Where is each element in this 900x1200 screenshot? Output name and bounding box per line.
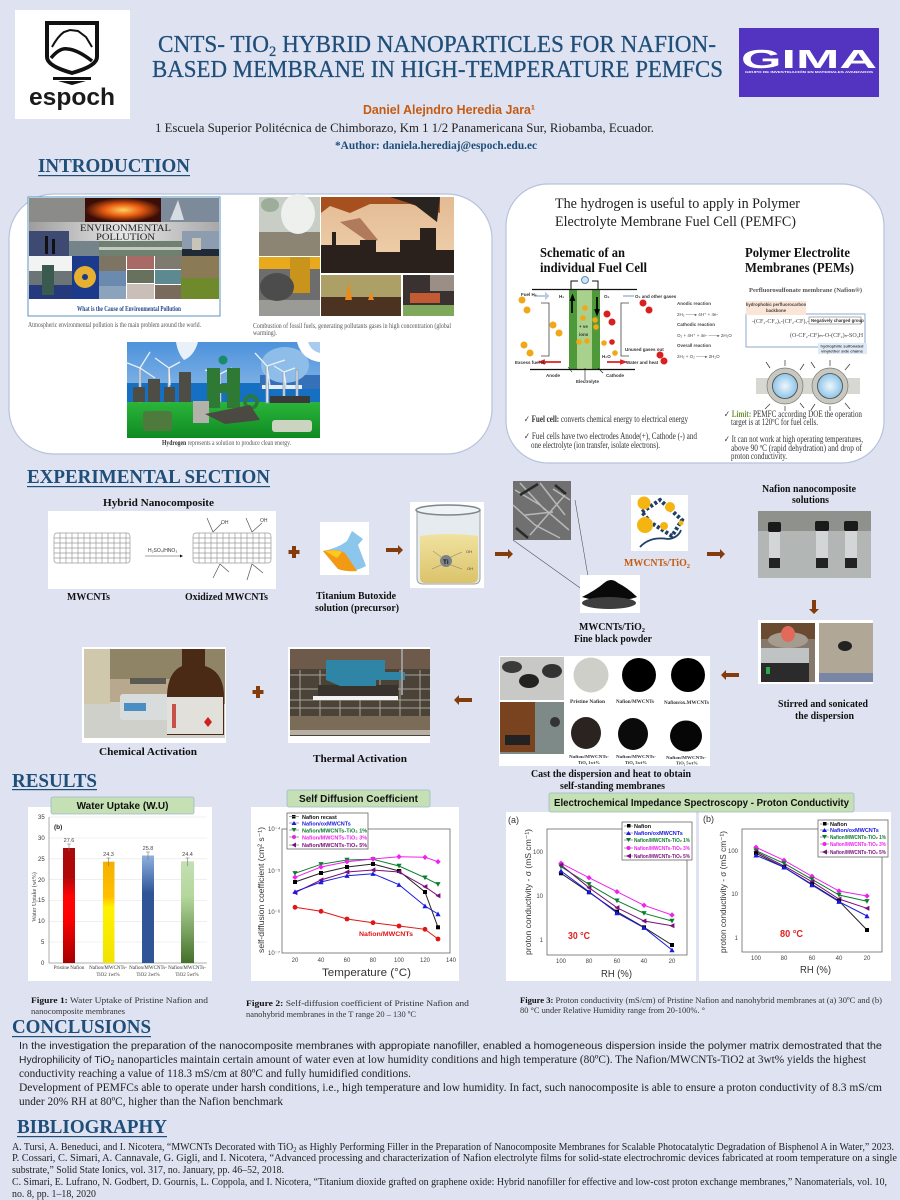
label: fine black powder: 2	[642, 627, 645, 634]
chart: self diffusion coefficient	[251, 807, 459, 981]
image: cast membranes: Nafion/MWCNTs-	[569, 754, 610, 759]
image: environmental pollution collage	[28, 197, 220, 316]
legend: Nafion/MWCNTs-TiO₂ 3%	[830, 842, 886, 848]
image: fossil fuel combustion collage	[259, 194, 454, 316]
diagram: Nafion chemical structure: backbone	[766, 308, 787, 313]
heading: polymer membranes	[745, 246, 854, 276]
image: cast membranes: TiO₂ 3wt%	[625, 760, 647, 765]
chart: water uptake bar chart: 5	[41, 940, 45, 946]
step: hybrid nanocomposite: OH	[260, 518, 268, 524]
image: flask with precursor	[320, 522, 369, 575]
arrow: to casting	[721, 670, 739, 680]
label: titanium butoxide: solution (precursor)	[315, 603, 399, 614]
icon: plus	[288, 546, 300, 558]
label: stirred and sonicated: the dispersion	[795, 711, 854, 722]
chart: proton conductivity at 80 C: 100	[751, 956, 762, 962]
caption: fossil fuels: warming).	[253, 329, 277, 337]
chart: proton conductivity at 80 C: 60	[809, 956, 816, 962]
image: cast membranes: Nafion/MWCNTs-	[616, 754, 657, 759]
image: MWCNTs/TiO2 nanostructure	[631, 495, 688, 551]
chart: proton conductivity at 30 C: (a)	[508, 815, 519, 825]
label: fine black powder: MWCNTs/TiO	[579, 622, 642, 633]
diagram: fuel cell schematic: Excess fuel H₂	[515, 360, 546, 365]
arrow: to SEM	[495, 549, 513, 559]
chart: water uptake bar chart: 15	[38, 898, 45, 904]
image: cast membranes: Nafion/MWCNTs-	[666, 755, 707, 760]
image: cast membranes	[499, 656, 710, 766]
title: HYBRID NANOPARTICLES FOR NAFION-	[276, 32, 716, 58]
diagram: Nafion chemical structure: Negatively charged group	[811, 318, 864, 323]
label: chemical activation: Chemical Activation	[99, 747, 197, 758]
logo: espoch	[15, 10, 130, 119]
diagram: fuel cell schematic: Anode	[546, 373, 560, 378]
bar: Pristine Nafion	[63, 838, 75, 963]
chart: water uptake bar chart: TiO2 3wt%	[136, 973, 160, 978]
heading: polymer membranes: Membranes (PEMs)	[745, 261, 854, 276]
label: perfluorosulfonate membrane: Perfluorosulfonate membrane (Nafion®)	[749, 287, 862, 294]
text: conclusions: In the investigation the preparation of the nanocomposite membranes with appropiate nanofiller, enabled a homogeneous dispersion inside the polymer matrix demostrated that the	[19, 1040, 882, 1052]
legend: Nafion/MWCNTs-TiO₂ 5%	[634, 854, 690, 860]
chart: water uptake bar chart: TiO2 5wt%	[175, 973, 199, 978]
bar: Pristine Nafion: 27.6	[64, 838, 74, 844]
heading: bibliography: BIBLIOGRAPHY	[17, 1116, 168, 1138]
chart: water uptake bar chart: 0	[41, 961, 45, 967]
diagram: oxidized nanotube	[193, 518, 271, 580]
text: hydrogen statement: The hydrogen is useful to apply in Polymer	[555, 196, 800, 212]
chart: water uptake bar chart: 20	[38, 878, 45, 884]
diagram: reaction equations: O₂ + 4H⁺ + 4e- ——▸ 2H₂O	[677, 333, 732, 338]
label: titanium butoxide: Titanium Butoxide	[316, 591, 397, 602]
chart: proton conductivity at 30 C: 80	[586, 959, 593, 965]
legend	[622, 822, 692, 860]
legend: Nafion/MWCNTs-TiO₂ 1%	[830, 835, 886, 841]
chart: self diffusion coefficient: 120	[420, 958, 431, 964]
text: conclusions: conductivity reaching a value of 118.3 mS/cm at 80ºC and fully humidified conditions.	[19, 1068, 411, 1080]
label: EIS proton conductivity: Electrochemical Impedance Spectroscopy - Proton Conductivity	[554, 798, 849, 809]
diagram: fuel cell schematic: + ve	[579, 324, 588, 329]
image: environmental pollution collage: POLLUTION	[96, 232, 156, 242]
diagram: fuel cell schematic: ions	[579, 332, 589, 337]
image: environmental pollution collage: What is the Cause of Environmental Pollution	[77, 304, 182, 313]
bar: 3 wt%: 25.8	[143, 846, 153, 852]
text: membrane limits bullets: ✓ It can not work at high operating temperatures,	[724, 434, 863, 444]
diagram: fuel cell schematic: Unused gases out	[625, 347, 664, 352]
image: cast membranes: Pristine Nafion	[570, 700, 605, 705]
heading: schematic	[540, 246, 647, 276]
text: hydrogen statement: Electrolyte Membrane Fuel Cell (PEMFC)	[555, 214, 796, 230]
chart: proton conductivity at 30 C: RH (%)	[601, 969, 632, 980]
diagram: Nafion chemical structure	[746, 301, 867, 354]
image: beaker with titanium: OH	[467, 566, 473, 571]
label: water uptake	[51, 797, 194, 814]
chart: self diffusion coefficient: 10⁻⁴	[268, 826, 281, 833]
label: self diffusion coefficient	[287, 790, 430, 807]
legend: Nafion/oxMWCNTs	[830, 828, 879, 834]
text: bibliography: no. 8, pp. 1–18, 2020	[12, 1189, 96, 1200]
author name: Daniel Alejndro Heredia Jara¹	[363, 103, 535, 117]
image: cast membranes: Nafion/ox.MWCNTs	[664, 701, 709, 706]
heading: polymer membranes: Polymer Electrolite	[745, 246, 850, 261]
image: cast membranes: TiO₂ 1wt%	[578, 760, 600, 765]
chart: proton conductivity at 80 C: 80 °C	[780, 929, 803, 940]
diagram: Nafion chemical structure: hydrophobic perfluorocarbon	[746, 302, 807, 307]
label: oxidized MWCNTs: Oxidized MWCNTs	[185, 592, 268, 603]
label: Nafion nanocomposite solutions	[762, 484, 857, 506]
text: membrane limits bullets: above 90 ºC (rapid dehydration) and drop of	[731, 443, 862, 453]
bar: 1 wt%	[103, 852, 114, 963]
chart: self diffusion coefficient: Nafion/MWCNTs	[359, 931, 413, 938]
diagram: fuel cell schematic: O₂	[604, 294, 610, 299]
text: conclusions: nanoparticles maintain certain amount of water even at low humidity conditions and high temperature (80ºC). The Nafion/MWCNTs-TiO2 at 3wt% yields the highest	[114, 1054, 867, 1066]
label: self diffusion coefficient: Self Diffusion Coefficient	[299, 794, 419, 805]
diagram: Nafion chemical structure: (O-CF₂-CF)ₘ-O-(CF₂)ₙ-SO₃H	[790, 332, 864, 339]
caption: figure 3: Figure 3: Proton conductivity (mS/cm) of Pristine Nafion and nanohybrid membranes at (a) 30ºC and (b)	[520, 995, 882, 1005]
chart: self diffusion coefficient: 60	[344, 958, 351, 964]
label: cast the dispersion: self-standing membranes	[560, 781, 665, 792]
text: bibliography: substrate,” Solid State Ionics, vol. 317, no. January, pp. 46–52, 2018.	[12, 1165, 284, 1176]
label: MWCNTs/TiO2: MWCNTs/TiO	[624, 558, 687, 569]
chart: proton conductivity at 80 C: 40	[836, 956, 843, 962]
chart: proton conductivity at 80 C: (b)	[703, 814, 714, 824]
icon: plus	[252, 686, 264, 698]
text: conclusions: 2	[111, 1060, 115, 1067]
arrow: to solutions	[707, 549, 725, 559]
chart: self diffusion coefficient: 80	[370, 958, 377, 964]
image: cast membranes: TiO₂ 5wt%	[676, 760, 698, 766]
arrow: acid oxidation: H₂SO₄/HNO₃	[148, 548, 177, 554]
caption: figure 1: Figure 1: Water Uptake of Pristine Nafion and	[31, 995, 209, 1005]
text: membrane limits bullets: proton conductivity.	[731, 451, 787, 461]
caption: figure 1	[31, 995, 209, 1016]
caption: figure 1: nanocomposite membranes	[31, 1006, 125, 1016]
chart: proton conductivity at 30 C: 60	[614, 959, 621, 965]
step: hybrid nanocomposite	[48, 498, 276, 589]
chart: proton conductivity at 30 C: 40	[641, 959, 648, 965]
chart: water uptake bar chart: Nafion/MWCNTs-	[168, 966, 206, 971]
chart: water uptake bar chart: 10	[38, 919, 45, 925]
heading: conclusions: CONCLUSIONS	[12, 1016, 151, 1038]
chart: proton conductivity at 80 C: RH (%)	[800, 965, 831, 976]
chart: self diffusion coefficient: 10⁻⁷	[268, 950, 280, 957]
panel: environmental pollution and hydrogen	[9, 194, 492, 454]
bar: 5 wt%	[181, 852, 194, 963]
diagram: fuel cell schematic	[515, 276, 677, 384]
arrow: to thermal activation	[454, 695, 472, 705]
chart: proton conductivity at 30 C: 100	[533, 850, 544, 856]
legend	[287, 813, 368, 849]
author email: *Author: daniela.herediaj@espoch.edu.ec	[335, 140, 537, 152]
diagram: reaction equations: Overall reaction	[677, 343, 711, 348]
text: fuel cell bullets: one electrolyte (ion transfer, isolate electrons).	[531, 440, 660, 450]
chart: water uptake bar chart: Water Uptake (wt%)	[31, 872, 38, 922]
logo: GIMA	[739, 28, 879, 97]
image: beaker with titanium: Ti	[443, 559, 449, 566]
heading: experimental section: EXPERIMENTAL SECTION	[27, 466, 271, 488]
diagram: fuel cell schematic: H₂O	[602, 354, 611, 359]
chart: water uptake bar chart: 35	[38, 815, 45, 821]
bar: 1 wt%: 24.3	[103, 852, 114, 858]
diagram: fuel cell schematic: H₂	[559, 294, 564, 299]
step: hybrid nanocomposite: Hybrid Nanocomposite	[103, 498, 215, 509]
logo: GIMA: GRUPO DE INVESTIGACIÓN EN MATERIALES AVANZADOS	[745, 69, 873, 74]
label: Nafion nanocomposite solutions: Nafion nanocomposite	[762, 484, 857, 495]
logo: GIMA: GIMA	[741, 44, 877, 74]
diagram: reaction equations: Anodic reaction	[677, 301, 711, 306]
caption: fossil fuels	[253, 322, 451, 337]
label: water uptake: Water Uptake (W.U)	[77, 801, 168, 812]
caption: figure 2	[246, 998, 470, 1019]
text: bibliography: A. Tursi, A. Beneduci, and I. Nicotera, “MWCNTs Decorated with TiO	[12, 1142, 311, 1153]
caption: figure 3: 80 °C under Relative Humidity range from 20-100%. °	[520, 1005, 705, 1015]
caption: figure 2: Figure 2: Self-diffusion coefficient of Pristine Nafion and	[246, 998, 470, 1008]
title: BASED MEMBRANE IN HIGH-TEMPERATURE PEMFCS	[152, 57, 723, 83]
legend: Nafion/MWCNTs-TiO₂ 5%	[302, 843, 367, 849]
bar: 5 wt%: 24.4	[182, 852, 193, 858]
legend: Nafion	[634, 824, 652, 830]
diagram: reaction equations: Cathodic reaction	[677, 322, 715, 327]
diagram: fuel cell schematic: Fuel H₂	[521, 292, 537, 297]
chart: proton conductivity at 30 C: 10	[536, 894, 544, 900]
text: conclusions: Development of PEMFCs able to operate under harsh conditions, i.e., high temperature and low humidity. In fact, such nanocomposite is able to ensure a proton conductivity of 8.3 mS/cm	[19, 1082, 882, 1094]
chart: self diffusion coefficient: 140	[446, 958, 457, 964]
chart: self diffusion coefficient: Temperature (°C)	[322, 967, 411, 979]
chart: self diffusion coefficient: self-diffusion coefficient (cm² s⁻¹)	[256, 827, 266, 953]
caption: pollution: Atmospheric environmental pollution is the main problem around the world.	[28, 321, 201, 329]
chart: water uptake bar chart: 30	[38, 836, 45, 842]
text: bibliography: 2	[293, 1146, 297, 1154]
heading: results: RESULTS	[12, 770, 97, 792]
heading: schematic: individual Fuel Cell	[540, 261, 647, 276]
chart: self diffusion coefficient: 40	[318, 958, 325, 964]
text: fuel cell bullets: ✓ Fuel cells have two electrodes Anode(+), Cathode (-) and	[524, 431, 697, 441]
diagram: fuel cell schematic: Electrolyte	[576, 379, 600, 384]
chart: proton conductivity at 30 C: 100	[556, 959, 567, 965]
label: stirred and sonicated: Stirred and sonicated	[778, 699, 868, 710]
label: Nafion nanocomposite solutions: solutions	[792, 495, 829, 506]
legend	[818, 820, 888, 857]
affiliation: 1 Escuela Superior Politécnica de Chimborazo, Km 1 1/2 Panamericana Sur, Riobamba, Ecuador.	[155, 121, 654, 135]
legend: Nafion/MWCNTs-TiO₂ 1%	[634, 838, 690, 844]
label: cast the dispersion	[531, 769, 691, 792]
chart: proton conductivity at 80 C: 20	[864, 956, 871, 962]
title	[152, 32, 723, 83]
chart: self diffusion coefficient: 10⁻⁵	[268, 868, 281, 875]
chart: proton conductivity at 80 C: 80	[781, 956, 788, 962]
diagram: pristine nanotube	[54, 533, 130, 563]
text: fuel cell bullets	[524, 414, 697, 450]
text: bibliography	[12, 1142, 897, 1200]
image: black powder with zoom lines	[513, 500, 640, 613]
legend: Nafion/MWCNTs-TiO₂ 1%	[302, 828, 367, 834]
text: fuel cell bullets: ✓ Fuel cell: converts chemical energy to electrical energy	[524, 414, 688, 424]
chart: proton conductivity at 80 C: 100	[728, 849, 739, 855]
chart: proton conductivity at 80 C	[699, 812, 891, 981]
label: stirred and sonicated	[778, 699, 868, 722]
legend: Nafion/oxMWCNTs	[634, 831, 683, 837]
chart: water uptake bar chart: TiO2 1wt%	[96, 973, 120, 978]
chart: proton conductivity at 30 C: 30 °C	[568, 931, 590, 942]
chart: self diffusion coefficient: 100	[394, 958, 405, 964]
bar: 3 wt%	[142, 846, 154, 963]
diagram: Nafion chemical structure: -(CF₂-CF₂)ₓ-(CF₂-CF)ᵧ-	[752, 318, 809, 325]
label: fine black powder	[574, 622, 653, 645]
text: bibliography: P. Cossari, C. Simari, A. Cannavale, G. Gigli, and I. Nicotera, “Advanced processing and characterization of Nafion electrolyte films for solid-state electrochromic devices fabricated at room temperature on a single	[12, 1153, 897, 1164]
chart: proton conductivity at 30 C: 1	[540, 938, 544, 944]
image: SEM micrograph	[513, 481, 571, 540]
image: beaker with titanium	[410, 502, 484, 588]
text: membrane limits bullets: ✓ Limit: PEMFC according DOE the operation	[724, 409, 862, 419]
arrow: acid oxidation	[145, 548, 183, 558]
image: cast membranes: Nafion/MWCNTs	[616, 700, 654, 705]
label: MWCNTs: MWCNTs	[67, 592, 110, 603]
chart: proton conductivity at 80 C: proton conductivity - σ (mS cm⁻¹)	[718, 831, 728, 953]
legend: Nafion/oxMWCNTs	[302, 822, 351, 828]
image: beaker with titanium: OH	[466, 549, 472, 554]
heading: introduction: INTRODUCTION	[38, 155, 191, 177]
diagram: Nafion chemical structure: hydrophilic sulfonated	[821, 344, 864, 348]
legend: Nafion/MWCNTs-TiO₂ 3%	[634, 846, 690, 852]
diagram: fuel cell schematic: Cathode	[606, 373, 624, 378]
image: environmental pollution collage: ENVIRONMENTAL	[80, 223, 171, 233]
caption: hydrogen: Hydrogen represents a solution to produce clean energy.	[162, 439, 291, 447]
image: solution vials	[758, 511, 871, 578]
arrow: down to stirring	[809, 600, 819, 614]
chart: proton conductivity at 30 C: 20	[669, 959, 676, 965]
image: stirring and sonication	[758, 620, 873, 684]
diagram: reaction equations	[677, 301, 732, 359]
chart: proton conductivity at 30 C: proton conductivity - σ (mS cm⁻¹)	[523, 829, 533, 955]
text: conclusions: under 20% RH at 80ºC, higher than the Nafion benchmark	[19, 1096, 283, 1108]
diagram: fuel cell schematic: Water and heat	[626, 360, 659, 365]
caption: figure 2: nanohybrid membranes in the T range 20 – 130 ºC	[246, 1009, 416, 1019]
label: MWCNTs/TiO2: 2	[687, 563, 690, 570]
title: 2	[269, 44, 276, 60]
text: hydrogen statement	[555, 196, 800, 230]
text: membrane limits bullets: target is at 120ºC for fuel cells.	[731, 417, 818, 427]
title: CNTS- TIO	[158, 32, 273, 58]
label: cast the dispersion: Cast the dispersion and heat to obtain	[531, 769, 691, 780]
chart: water uptake bar chart: Nafion/MWCNTs-	[129, 966, 167, 971]
heading: schematic: Schematic of an	[540, 246, 625, 261]
label: EIS proton conductivity	[549, 793, 854, 812]
chart: proton conductivity at 30 C	[506, 812, 696, 981]
diagram: reaction equations: 2H₂ + O₂ ——▸ 2H₂O	[677, 354, 720, 359]
diagram: Nafion ion clusters	[756, 360, 860, 411]
legend: Nafion	[830, 822, 848, 828]
legend: Nafion/MWCNTs-TiO₂ 3%	[302, 836, 367, 842]
caption: figure 3	[520, 995, 882, 1015]
diagram: fuel cell schematic: O₂ and other gases	[635, 294, 677, 299]
chart: water uptake bar chart: 25	[38, 857, 45, 863]
label: fine black powder: Fine black powder	[574, 634, 653, 645]
chart: self diffusion coefficient: 10⁻⁶	[268, 909, 281, 916]
panel: PEMFC background	[506, 184, 884, 463]
step: hybrid nanocomposite: OH	[221, 520, 229, 526]
chart: water uptake bar chart: (b)	[54, 824, 62, 831]
legend: Nafion recast	[302, 815, 337, 821]
diagram: Nafion chemical structure: vinylether side chains	[821, 348, 864, 354]
chart: water uptake bar chart	[28, 807, 212, 981]
text: conclusions	[19, 1040, 882, 1108]
chart: water uptake bar chart: Pristine Nafion	[54, 966, 85, 971]
image: chemical activation lab bench	[82, 647, 226, 743]
image: thermal activation press	[288, 647, 430, 743]
chart: proton conductivity at 80 C: 10	[731, 892, 739, 898]
logo: espoch: espoch	[29, 84, 115, 111]
text: conclusions: Hydrophilicity of TiO	[19, 1054, 111, 1066]
label: titanium butoxide	[315, 591, 399, 614]
chart: water uptake bar chart: Nafion/MWCNTs-	[89, 966, 127, 971]
image: hydrogen clean energy illustration	[125, 342, 320, 438]
legend: Nafion/MWCNTs-TiO₂ 5%	[830, 850, 886, 856]
chart: self diffusion coefficient: 20	[292, 958, 299, 964]
chart: proton conductivity at 80 C: 1	[735, 936, 739, 942]
diagram: reaction equations: 2H₂ ——▸ 4H⁺ + 4e-	[677, 312, 719, 317]
caption: fossil fuels: Combustion of fossil fuels, generating pollutants gases in high concentration (global	[253, 322, 451, 330]
label: thermal activation: Thermal Activation	[313, 754, 407, 765]
text: membrane limits bullets	[724, 409, 863, 461]
arrow: to beaker	[386, 545, 403, 555]
